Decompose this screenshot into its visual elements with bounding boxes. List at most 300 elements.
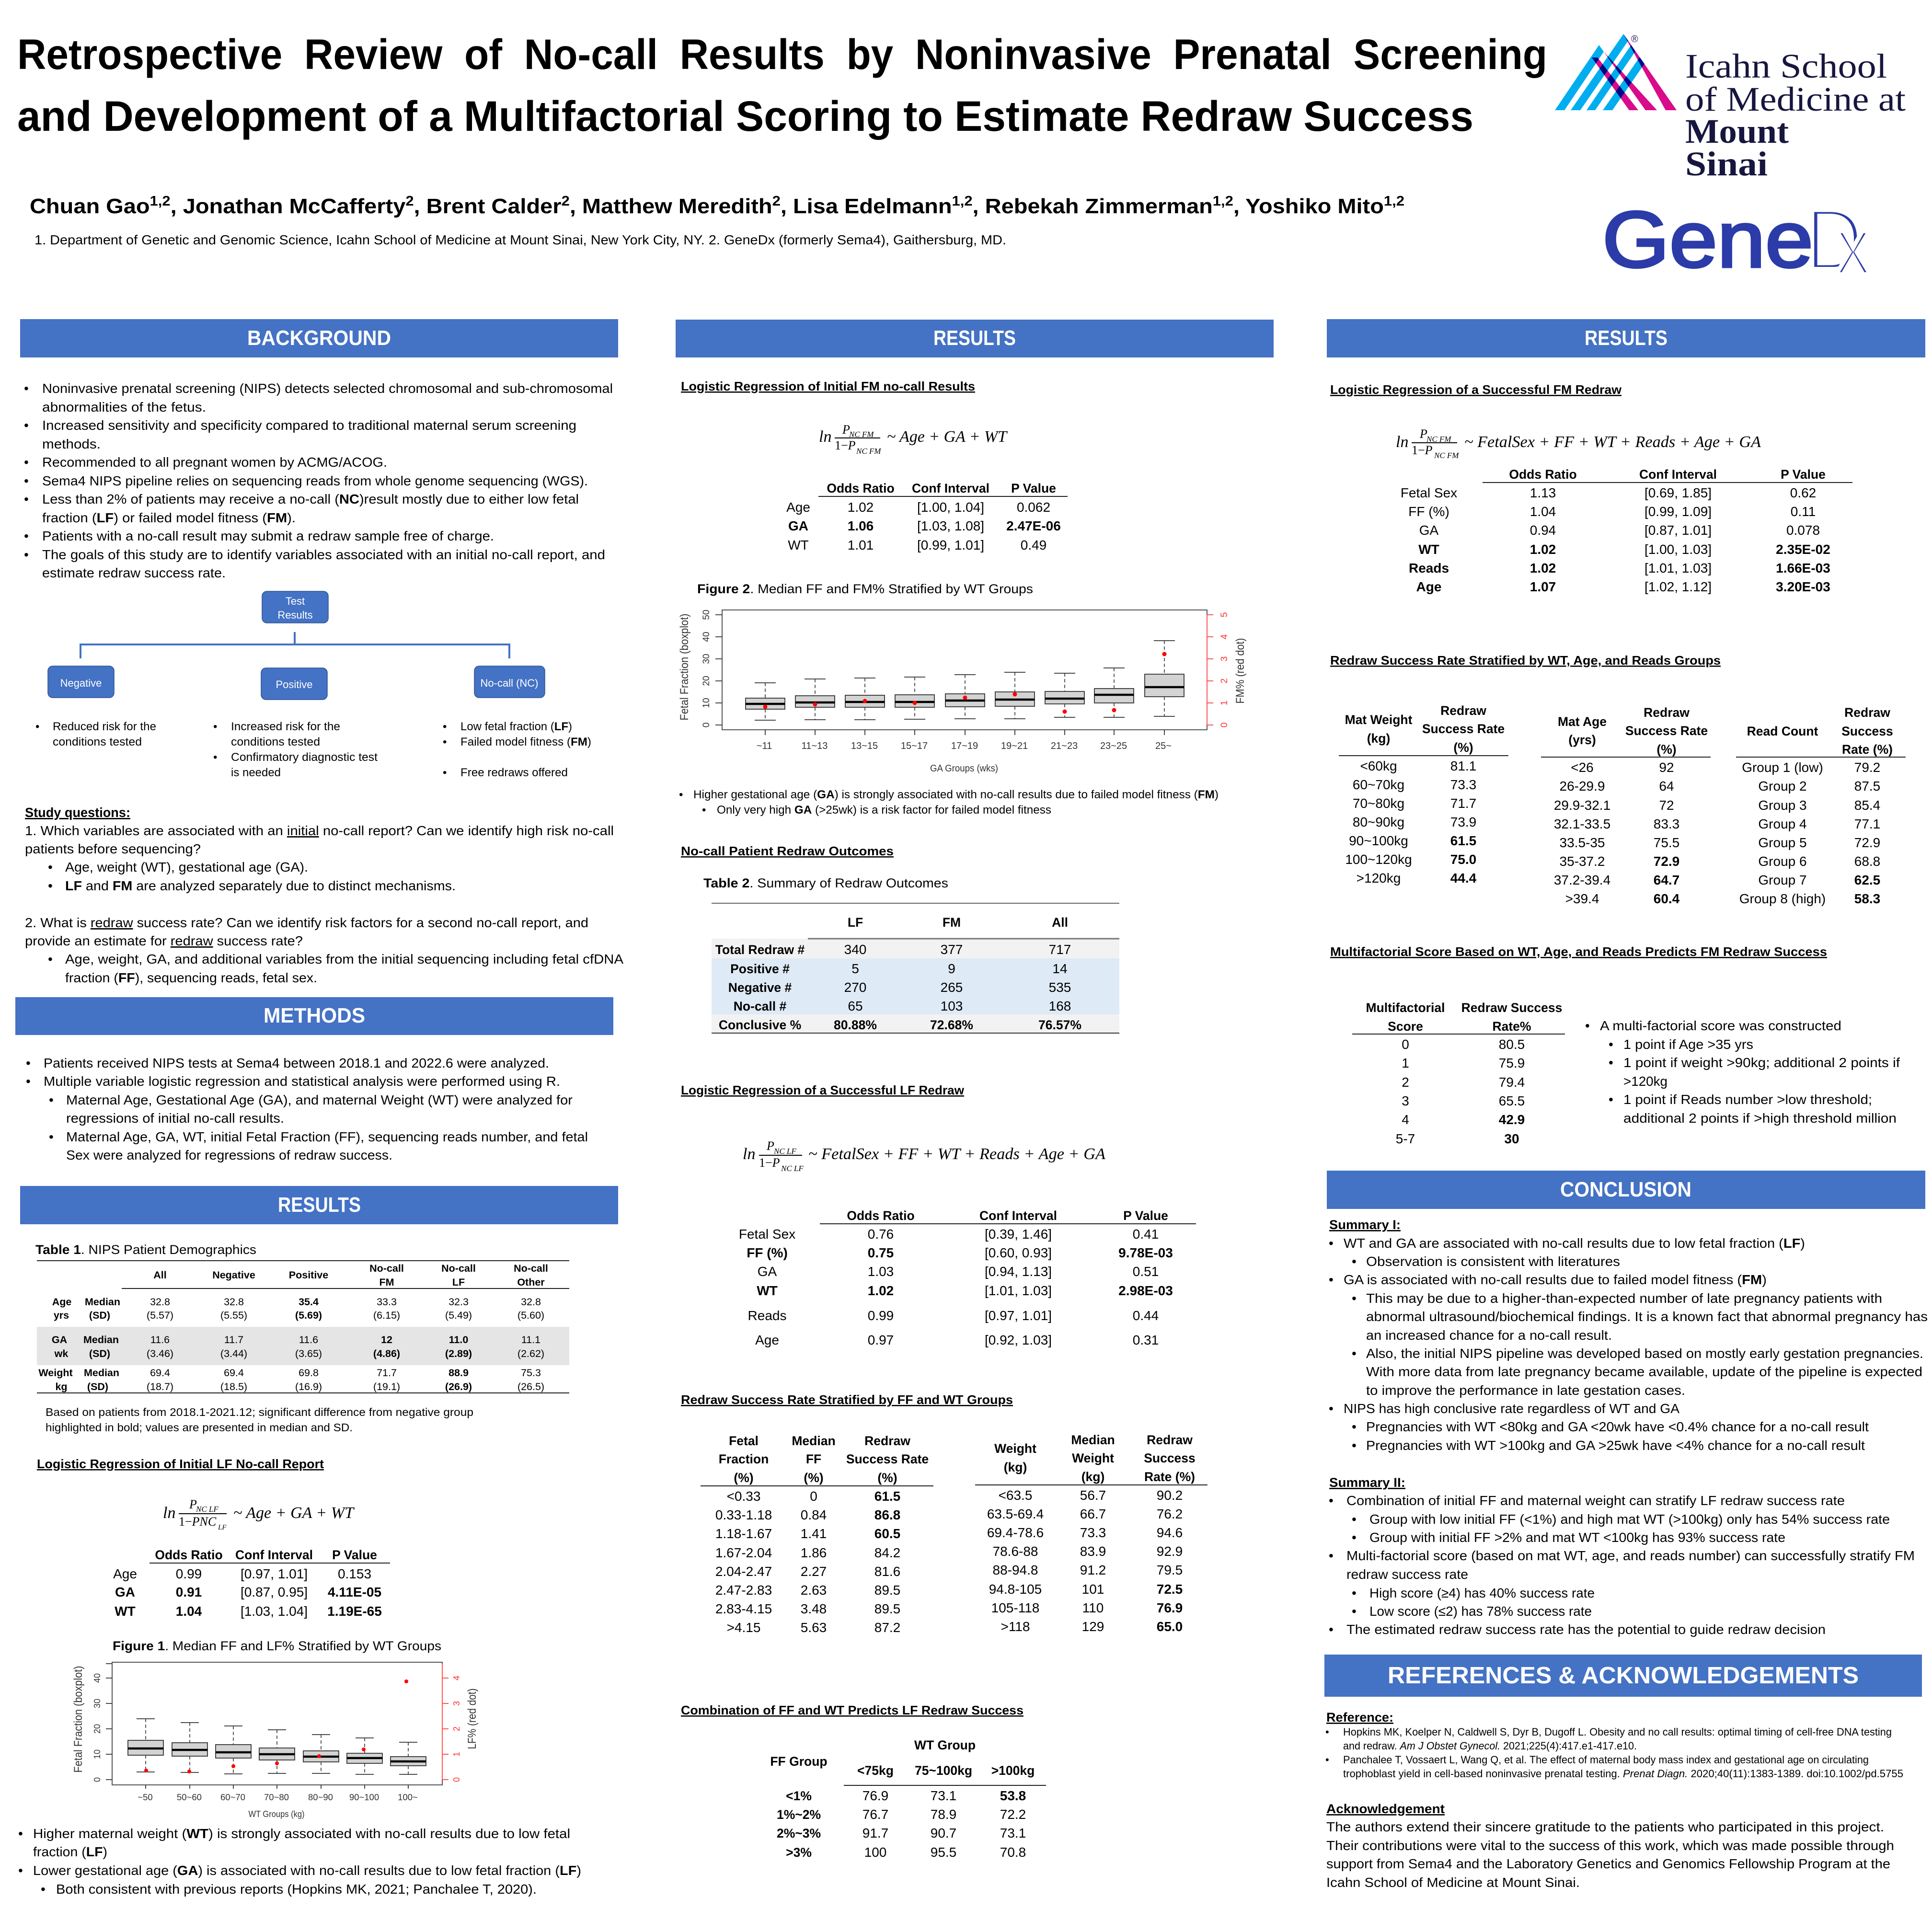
authors: , Lisa Edelmann <box>781 195 952 218</box>
acknowledgement: Their contributions were vital to the success of this work, which was made possible through <box>1326 1838 1894 1853</box>
negative notes: conditions tested <box>53 736 142 748</box>
table: FF group by WT group: 95.5 <box>931 1845 956 1860</box>
study questions <box>25 805 623 985</box>
plot frame and axes: 13~15 <box>851 741 878 751</box>
node: no-call: No-call (NC) <box>480 677 539 689</box>
table: multifactorial score: Rate% <box>1492 1019 1531 1034</box>
subheading: initial LF regression: Logistic Regression of Initial LF No-call Report <box>37 1457 324 1471</box>
subheading: LF redraw regression: Logistic Regression of a Successful LF Redraw <box>681 1083 965 1097</box>
table 2: redraw outcomes: 265 <box>941 980 963 995</box>
background bullet list: • <box>24 492 29 506</box>
background bullet list: Sema4 NIPS pipeline relies on sequencing reads from whole genome sequencing (WGS). <box>42 473 588 488</box>
table 2: redraw outcomes: All <box>1052 915 1068 930</box>
plot frame and axes: 60~70 <box>220 1792 245 1802</box>
summary I: NIPS has high conclusive rate regardless of WT and GA <box>1344 1401 1679 1416</box>
table: success rate by weight <box>975 1433 1208 1634</box>
summary II: The estimated redraw success rate has the potential to guide redraw decision <box>1346 1622 1826 1637</box>
plot frame and axes: 4 <box>452 1676 461 1680</box>
table: success rate by maternal weight: 90~100kg <box>1349 833 1408 848</box>
table 1: patient demographics: (4.86) <box>373 1348 400 1359</box>
methods bullet list: • <box>49 1092 54 1107</box>
table: success rate by weight: Weight <box>994 1441 1036 1456</box>
table: success rate by maternal weight: (kg) <box>1367 731 1390 746</box>
table: success rate by fetal fraction: 84.2 <box>874 1545 900 1560</box>
plot frame and axes: 2 <box>452 1726 461 1731</box>
table: success rate by read count: 68.8 <box>1854 854 1880 869</box>
summary II: Summary II: <box>1329 1475 1405 1490</box>
plot frame and axes: 70~80 <box>264 1792 289 1802</box>
table: FF group by WT group <box>770 1738 1046 1860</box>
heading: background: BACKGROUND <box>247 326 391 350</box>
figure 1 takeaways: Lower gestational age ( GA) is associated with no-call results due to low fetal fraction ( LF) <box>33 1863 581 1878</box>
subheading: success rate by WT, age, reads: Redraw Success Rate Stratified by WT, Age, and Reads Groups <box>1330 653 1721 667</box>
table: success rate by weight: 56.7 <box>1080 1488 1106 1503</box>
table: success rate by maternal weight: 73.3 <box>1450 777 1476 792</box>
score construction notes: 1 point if weight >90kg; additional 2 points if <box>1623 1055 1900 1070</box>
red dots: FM percent <box>763 652 1166 714</box>
plot frame and axes: 100~ <box>398 1792 418 1802</box>
summary I: • <box>1329 1401 1334 1416</box>
no-call notes: • <box>443 736 447 748</box>
table: success rate by read count: Success <box>1841 724 1893 738</box>
table: success rate by weight: 65.0 <box>1157 1619 1183 1634</box>
background bullet list: The goals of this study are to identify variables associated with an initial no-call report, and <box>42 547 605 562</box>
score construction notes: • <box>1609 1055 1613 1070</box>
authors: 1,2 <box>150 194 171 209</box>
no-call notes: Free redraws offered <box>460 766 568 779</box>
table 1: patient demographics: (6.15) <box>373 1310 400 1321</box>
regression table: LF redraw: 2.98E-03 <box>1118 1283 1173 1298</box>
summary I: • <box>1329 1272 1334 1287</box>
logo: Mount Sinai: Mount <box>1685 112 1789 150</box>
background bullet list: • <box>24 547 29 562</box>
regression table: initial LF: WT <box>115 1604 136 1619</box>
figure 1 takeaways: • <box>41 1882 46 1897</box>
table: success rate by fetal fraction: 2.27 <box>801 1564 827 1579</box>
table: success rate by fetal fraction: (%) <box>734 1471 754 1485</box>
plot frame and axes: 20 <box>702 676 712 686</box>
table: multifactorial score: 80.5 <box>1499 1037 1525 1052</box>
table: success rate by read count: Group 4 <box>1758 816 1807 831</box>
table 1: patient demographics: 69.4 <box>224 1367 244 1379</box>
background bullet list: Noninvasive prenatal screening (NIPS) detects selected chromosomal and sub-chromosomal <box>42 381 613 396</box>
plot frame and axes: 1 <box>452 1752 461 1757</box>
score construction notes: additional 2 points if >high threshold million <box>1623 1111 1897 1126</box>
title: and Development of a Multifactorial Scoring to Estimate Redraw Success <box>17 92 1473 140</box>
positive notes: is needed <box>231 766 281 779</box>
plot frame and axes: 50 <box>702 610 712 620</box>
table: success rate by fetal fraction: >4.15 <box>727 1620 760 1635</box>
regression table: initial FM: 0.062 <box>1017 500 1050 515</box>
acknowledgement: Acknowledgement <box>1326 1802 1445 1816</box>
table: success rate by weight: 83.9 <box>1080 1544 1106 1559</box>
study questions: 2. What is redraw success rate? Can we identify risk factors for a second no-call report, and <box>25 915 588 930</box>
summary II: redraw success rate <box>1346 1567 1468 1582</box>
score construction notes: A multi-factorial score was constructed <box>1600 1018 1841 1033</box>
table 2: redraw outcomes <box>712 903 1119 1033</box>
formula: FM no-call: P <box>842 423 850 437</box>
formula: LF redraw: NC LF <box>781 1164 804 1173</box>
table 2: redraw outcomes: Conclusive % <box>719 1018 801 1032</box>
heading: results <box>676 320 1274 357</box>
table: multifactorial score: 42.9 <box>1499 1112 1525 1127</box>
authors: , Yoshiko Mito <box>1233 195 1384 218</box>
background bullet list: • <box>24 418 29 433</box>
plot frame and axes: 2 <box>1219 678 1230 683</box>
logo: GeneDx: Gene <box>1602 196 1813 284</box>
regression table: FM redraw: Fetal Sex <box>1401 485 1457 500</box>
regression table: LF redraw: 9.78E-03 <box>1118 1245 1173 1260</box>
table: success rate by read count: 72.9 <box>1854 835 1880 850</box>
table: multifactorial score <box>1352 1000 1565 1146</box>
formula: LF redraw: 1−P <box>759 1156 780 1170</box>
table 1: patient demographics: LF <box>452 1276 465 1288</box>
table 1 footnote: Based on patients from 2018.1-2021.12; significant difference from negative group <box>46 1406 473 1418</box>
table: success rate by fetal fraction: 5.63 <box>801 1620 827 1635</box>
study questions: • <box>48 952 53 966</box>
table: success rate by weight: Median <box>1071 1433 1115 1447</box>
summary I: Pregnancies with WT >100kg and GA >25wk have <4% chance for a no-call result <box>1366 1438 1865 1453</box>
table: success rate by fetal fraction: 1.41 <box>801 1526 827 1541</box>
poster header <box>17 30 1906 292</box>
table: multifactorial score: 4 <box>1402 1112 1409 1127</box>
background bullet list: Less than 2% of patients may receive a no-call ( NC)result mostly due to either low fetal <box>42 492 579 506</box>
heading: references and acknowledgements <box>1324 1655 1922 1697</box>
table: success rate by weight: 91.2 <box>1080 1563 1106 1577</box>
table: success rate by read count: 85.4 <box>1854 798 1880 813</box>
plot frame and axes: 0 <box>452 1777 461 1782</box>
regression table: FM redraw: Conf Interval <box>1639 467 1717 482</box>
table: success rate by fetal fraction: 1.86 <box>801 1545 827 1560</box>
panel: results left column <box>18 1186 618 1897</box>
heading: results: RESULTS <box>933 326 1016 350</box>
table: success rate by maternal age: 64 <box>1659 779 1674 794</box>
table: multifactorial score: 30 <box>1504 1131 1519 1146</box>
background bullet list: Recommended to all pregnant women by ACMG/ACOG. <box>42 455 387 470</box>
reference list: • <box>1325 1754 1329 1766</box>
summary I: This may be due to a higher-than-expected number of late pregnancy patients with <box>1366 1291 1882 1306</box>
formula: LF no-call <box>163 1497 355 1531</box>
plot frame and axes: 0 <box>1219 723 1230 727</box>
table: success rate by maternal age: 64.7 <box>1654 873 1679 887</box>
table: multifactorial score: 2 <box>1402 1075 1409 1090</box>
table: success rate by weight: 110 <box>1082 1600 1104 1615</box>
table: multifactorial score: 0 <box>1402 1037 1409 1052</box>
logo: Mount Sinai <box>1555 34 1906 183</box>
table: success rate by maternal age: Redraw <box>1644 705 1690 720</box>
regression table: LF redraw: [0.97, 1.01] <box>985 1308 1052 1323</box>
summary I: • <box>1352 1419 1357 1434</box>
formula: LF no-call: ln <box>163 1504 175 1522</box>
table 1: patient demographics: 32.8 <box>521 1296 541 1308</box>
regression table: initial FM: 0.49 <box>1021 538 1046 552</box>
regression table: LF redraw: 0.97 <box>868 1333 894 1347</box>
plot frame and axes: 0 <box>702 723 712 727</box>
table: success rate by maternal age: 75.5 <box>1654 835 1679 850</box>
table: success rate by fetal fraction: 1.67-2.04 <box>715 1545 772 1560</box>
study questions: Study questions: <box>25 805 130 820</box>
table 2: redraw outcomes: FM <box>943 915 961 930</box>
table 2: redraw outcomes: 270 <box>844 980 866 995</box>
summary II: • <box>1329 1548 1334 1563</box>
acknowledgement: The authors extend their sincere gratitude to the patients who participated in this project. <box>1326 1819 1884 1834</box>
plot frame and axes <box>678 610 1247 774</box>
no-call notes: • <box>443 766 447 779</box>
table: success rate by read count: 87.5 <box>1854 779 1880 794</box>
formula: LF no-call: 1−PNC <box>179 1515 217 1529</box>
formula: LF no-call: NC LF <box>196 1505 218 1514</box>
table 2: redraw outcomes: 717 <box>1049 942 1071 957</box>
table: success rate by fetal fraction: 87.2 <box>874 1620 900 1635</box>
regression table: initial LF: Age <box>113 1566 137 1581</box>
formula: LF redraw <box>743 1139 1105 1173</box>
authors: , Matthew Meredith <box>570 195 772 218</box>
summary II: Multi-factorial score (based on mat WT, age, and reads number) can successfully stratify FM <box>1346 1548 1915 1563</box>
table: success rate by fetal fraction: 0.84 <box>801 1507 827 1522</box>
table 1: patient demographics: (26.9) <box>445 1381 472 1392</box>
table 1: patient demographics <box>37 1261 569 1393</box>
table: success rate by weight: 94.8-105 <box>989 1582 1042 1597</box>
table: FF group by WT group: 100 <box>864 1845 886 1860</box>
table: success rate by maternal weight: Success Rate <box>1422 722 1505 736</box>
regression table: FM redraw: GA <box>1419 523 1439 538</box>
table 1: patient demographics: (SD) <box>87 1381 108 1392</box>
table: success rate by maternal weight: 70~80kg <box>1353 796 1404 811</box>
table 2: redraw outcomes: 65 <box>848 999 863 1013</box>
formula: LF redraw: NC LF <box>773 1147 796 1156</box>
table: success rate by maternal age: 72.9 <box>1654 854 1679 869</box>
table: success rate by read count: Rate (%) <box>1842 742 1893 757</box>
plot frame and axes: 3 <box>1219 656 1230 661</box>
figure 2 takeaways: • <box>679 788 683 801</box>
formula: FM redraw: P <box>1419 427 1427 441</box>
formula: FM no-call: ~ Age + GA + WT <box>887 428 1008 446</box>
study questions: LF and FM are analyzed separately due to distinct mechanisms. <box>65 878 456 893</box>
figure 1 takeaways: Higher maternal weight ( WT) is strongly associated with no-call results due to low fetal <box>33 1826 570 1841</box>
table 1: patient demographics: 33.3 <box>377 1296 397 1308</box>
summary I: • <box>1352 1254 1357 1269</box>
boxes by gestational age group <box>746 641 1184 720</box>
regression table: LF redraw: [0.94, 1.13] <box>985 1264 1052 1279</box>
flowchart: test results <box>35 591 591 779</box>
regression table: LF redraw: 0.51 <box>1133 1264 1159 1279</box>
plot frame and axes: 5 <box>1219 612 1230 617</box>
no-call notes: Failed model fitness (FM) <box>460 736 591 748</box>
plot frame and axes: 4 <box>1219 634 1230 639</box>
methods bullet list: Maternal Age, Gestational Age (GA), and maternal Weight (WT) were analyzed for <box>66 1092 573 1107</box>
table: success rate by maternal age <box>1541 705 1711 906</box>
table 1: patient demographics: Age <box>52 1296 71 1308</box>
plot frame and axes: 3 <box>452 1701 461 1706</box>
logo: Mount Sinai: ® <box>1631 34 1638 45</box>
table: success rate by maternal age: (yrs) <box>1568 733 1596 747</box>
table 1: patient demographics: 12 <box>381 1334 392 1346</box>
table: success rate by fetal fraction: 81.6 <box>874 1564 900 1579</box>
regression table: FM redraw: 0.62 <box>1790 485 1816 500</box>
plot frame and axes: 90~100 <box>349 1792 379 1802</box>
table: success rate by weight: 63.5-69.4 <box>987 1506 1044 1521</box>
regression table: LF redraw <box>739 1208 1196 1347</box>
authors: 1,2 <box>1213 194 1233 209</box>
table: success rate by read count: Group 2 <box>1758 779 1807 794</box>
table 1 footnote: highlighted in bold; values are presented in median and SD. <box>46 1421 353 1434</box>
regression table: FM redraw: P Value <box>1781 467 1826 482</box>
background bullet list: Increased sensitivity and specificity compared to traditional maternal serum screening <box>42 418 576 433</box>
regression table: initial FM: P Value <box>1011 481 1056 495</box>
no-call notes: • <box>443 720 447 733</box>
table: multifactorial score: 75.9 <box>1499 1056 1525 1070</box>
table: success rate by maternal age: >39.4 <box>1565 891 1599 906</box>
summary I: GA is associated with no-call results due to failed model fitness ( FM) <box>1344 1272 1767 1287</box>
regression table: initial FM: 1.06 <box>848 518 874 533</box>
table: success rate by read count <box>1736 705 1906 906</box>
table: success rate by fetal fraction: 2.47-2.83 <box>715 1583 772 1598</box>
summary I: Summary I: <box>1329 1218 1401 1232</box>
score construction notes: • <box>1609 1037 1613 1052</box>
heading: results: RESULTS <box>1585 326 1668 350</box>
regression table: LF redraw: WT <box>757 1283 778 1298</box>
summary II: • <box>1329 1622 1334 1637</box>
score construction notes: • <box>1609 1092 1613 1107</box>
formula: FM no-call: NC FM <box>849 430 874 439</box>
authors: , Brent Calder <box>414 195 562 218</box>
regression table: FM redraw: [0.87, 1.01] <box>1644 523 1712 538</box>
node: positive: Positive <box>276 678 313 690</box>
plot frame and axes: Fetal Fraction (boxplot) <box>72 1666 85 1773</box>
plot frame and axes: 20 <box>92 1724 102 1734</box>
reference list <box>1325 1710 1903 1780</box>
table: success rate by weight: 76.2 <box>1157 1506 1183 1521</box>
table 2: redraw outcomes: No-call # <box>734 999 786 1013</box>
table: success rate by maternal weight <box>1339 703 1508 886</box>
positive notes <box>213 720 378 779</box>
regression table: FM redraw: 1.13 <box>1530 485 1556 500</box>
table: success rate by weight: 101 <box>1082 1582 1104 1597</box>
figure 2 takeaways: Higher gestational age (GA) is strongly associated with no-call results due to failed model fitness ( FM) <box>693 788 1219 801</box>
reference list: Hopkins MK, Koelper N, Caldwell S, Dyr B, Dugoff L. Obesity and no call results: optimal timing of cell-free DNA testing <box>1343 1726 1892 1738</box>
figure 2 takeaways: Only very high GA (>25wk) is a risk factor for failed model fitness <box>717 804 1051 816</box>
table: success rate by fetal fraction: Fraction <box>719 1452 769 1466</box>
table: FF group by WT group: 90.7 <box>931 1826 956 1840</box>
regression table: FM redraw: 0.078 <box>1786 523 1820 538</box>
study questions: Age, weight (WT), gestational age (GA). <box>65 860 308 874</box>
table: success rate by fetal fraction: 89.5 <box>874 1583 900 1598</box>
table 1: patient demographics: (SD) <box>89 1348 110 1359</box>
heading: results: RESULTS <box>278 1193 361 1217</box>
panel: results right column <box>1327 319 1925 1146</box>
regression table: FM redraw: 0.94 <box>1530 523 1556 538</box>
regression table: FM redraw: 0.11 <box>1791 504 1816 519</box>
table 1: patient demographics: (2.89) <box>445 1348 472 1359</box>
table 1: patient demographics: (5.49) <box>445 1310 472 1321</box>
table: FF group by WT group: 73.1 <box>931 1788 956 1803</box>
table 1: patient demographics: Median <box>85 1296 120 1308</box>
regression table: initial FM: 1.02 <box>848 500 874 515</box>
table: success rate by maternal weight: (%) <box>1453 740 1473 755</box>
regression table: LF redraw: 1.02 <box>868 1283 894 1298</box>
reference list: Panchalee T, Vossaert L, Wang Q, et al. The effect of maternal body mass index and gestational age on circulating <box>1343 1754 1869 1766</box>
table: success rate by weight: (kg) <box>1081 1470 1104 1484</box>
plot frame and axes: 19~21 <box>1001 741 1028 751</box>
formula: FM no-call <box>819 423 1008 456</box>
table: success rate by weight: 78.6-88 <box>993 1544 1038 1559</box>
authors: , Jonathan McCafferty <box>171 195 406 218</box>
regression table: LF redraw: 1.03 <box>868 1264 894 1279</box>
table 1 caption: Table 1. NIPS Patient Demographics <box>35 1242 256 1257</box>
formula: FM redraw: ln <box>1396 433 1408 451</box>
table: multifactorial score: Score <box>1388 1019 1423 1034</box>
table: success rate by weight: 69.4-78.6 <box>987 1525 1044 1540</box>
table: success rate by weight: Rate (%) <box>1144 1470 1195 1484</box>
reference list: trophoblast yield in cell-based noninvasive prenatal testing. Prenat Diagn. 2020;40(11):1383-1389. doi:10.1002/pd.5755 <box>1343 1768 1903 1780</box>
plot frame and axes: 23~25 <box>1100 741 1127 751</box>
summary II: Low score (≤2) has 78% success rate <box>1369 1604 1592 1619</box>
table 1: patient demographics: (3.65) <box>295 1348 322 1359</box>
background bullet list: methods. <box>42 437 101 451</box>
summary I: • <box>1352 1291 1357 1306</box>
table: success rate by maternal age: 92 <box>1659 760 1674 775</box>
node: test results <box>262 591 328 623</box>
boxes by weight group <box>128 1719 426 1774</box>
summary II: High score (≥4) has 40% success rate <box>1369 1586 1595 1600</box>
table: success rate by read count: Group 1 (low) <box>1742 760 1823 775</box>
subheading: multifactorial score: Multifactorial Score Based on WT, Age, and Reads Predicts FM Redraw Success <box>1330 944 1827 959</box>
table 1: patient demographics: (5.69) <box>295 1310 322 1321</box>
table 1: patient demographics: Negative <box>212 1269 255 1281</box>
title <box>17 30 1547 140</box>
node: test results: Test <box>286 595 305 607</box>
table: success rate by maternal weight: 75.0 <box>1450 852 1476 867</box>
table 1: patient demographics: (3.46) <box>147 1348 173 1359</box>
regression table: LF redraw: [0.92, 1.03] <box>985 1333 1052 1347</box>
plot frame and axes: 30 <box>702 654 712 664</box>
table: success rate by fetal fraction: <0.33 <box>727 1489 760 1504</box>
score construction notes: 1 point if Reads number >low threshold; <box>1623 1092 1872 1107</box>
table 2: redraw outcomes: 535 <box>1049 980 1071 995</box>
authors: 2 <box>562 194 570 209</box>
table 1: patient demographics: Median <box>83 1334 119 1346</box>
authors: 1,2 <box>952 194 973 209</box>
regression table: initial FM: [1.03, 1.08] <box>917 518 984 533</box>
table: FF group by WT group: 2%~3% <box>777 1826 821 1840</box>
summary II: • <box>1352 1530 1357 1545</box>
table: success rate by fetal fraction: 3.48 <box>801 1601 827 1616</box>
table 1: patient demographics: 11.0 <box>449 1334 468 1346</box>
regression table: LF redraw: [0.39, 1.46] <box>985 1227 1052 1242</box>
positive notes: • <box>213 751 217 764</box>
table: success rate by maternal age: 32.1-33.5 <box>1554 816 1610 831</box>
positive notes: Confirmatory diagnostic test <box>231 751 378 764</box>
table: FF group by WT group: 72.2 <box>1000 1807 1026 1822</box>
methods bullet list: • <box>26 1074 31 1089</box>
table: success rate by read count: Group 8 (high) <box>1739 891 1826 906</box>
plot frame and axes: 10 <box>92 1749 102 1759</box>
summary I: an increased chance for a no-call result. <box>1366 1328 1612 1343</box>
regression table: initial LF: 0.99 <box>176 1566 202 1581</box>
table: success rate by maternal age: 26-29.9 <box>1560 779 1605 794</box>
plot frame and axes: 40 <box>92 1673 102 1683</box>
regression table: initial LF: 1.19E-65 <box>327 1604 382 1619</box>
table 1: patient demographics: Median <box>84 1367 119 1379</box>
table 1: patient demographics: 32.8 <box>224 1296 244 1308</box>
regression table: initial FM <box>786 481 1068 552</box>
heading: references and acknowledgements: REFERENCES & ACKNOWLEDGEMENTS <box>1388 1663 1859 1689</box>
chart: figure 1 boxplot <box>72 1662 479 1819</box>
panel: references and acknowledgements <box>1324 1655 1922 1890</box>
positive notes: conditions tested <box>231 736 320 748</box>
regression table: FM redraw <box>1401 467 1852 594</box>
table 2: redraw outcomes: 76.57% <box>1038 1018 1081 1032</box>
